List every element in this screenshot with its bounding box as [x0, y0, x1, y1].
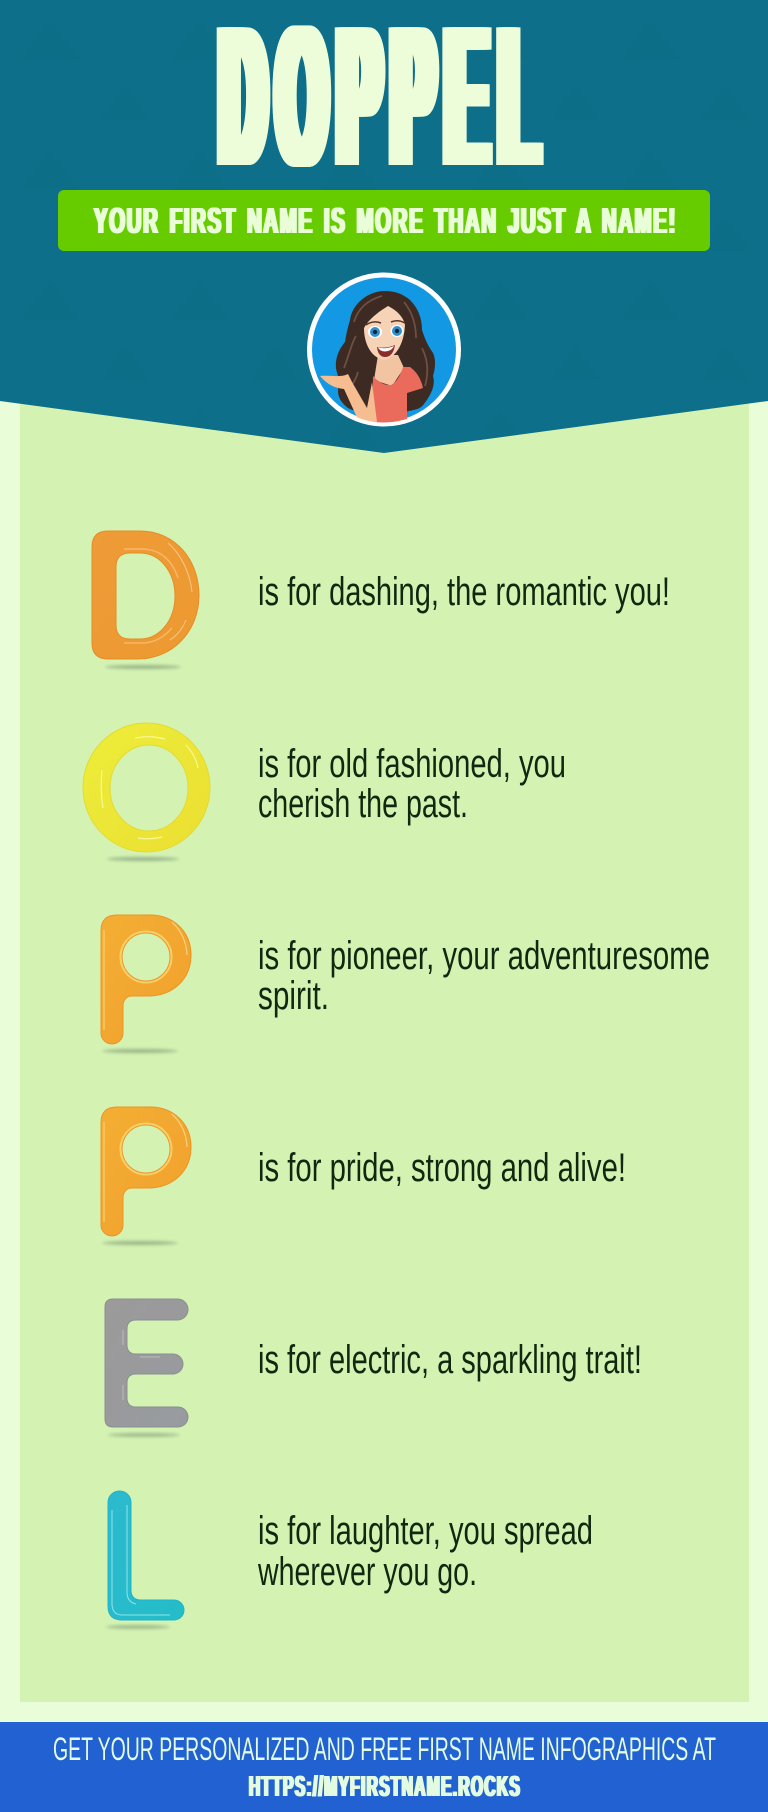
icon: letter L shadow	[106, 1625, 170, 1629]
row: letter P	[101, 915, 710, 1053]
icon: second letter P shadow	[102, 1241, 178, 1245]
icon: letter P	[101, 915, 191, 1044]
text: cherish the past: cherish the past.	[258, 782, 468, 826]
text: pride: is for pride, strong and alive!	[258, 1146, 626, 1190]
row: letter L	[106, 1491, 593, 1629]
icon: letter P shadow	[102, 1049, 178, 1053]
content panel	[20, 380, 749, 1702]
row: letter E	[105, 1299, 642, 1437]
icon: letter O	[83, 723, 210, 852]
icon: letter O shadow	[107, 857, 179, 861]
icon: letter D shadow	[105, 665, 181, 669]
icon: second letter P	[101, 1107, 191, 1236]
icon: letter E shadow	[108, 1433, 180, 1437]
text: laughter: is for laughter, you spread	[258, 1509, 593, 1553]
row: letter D	[92, 531, 670, 669]
text: old fashioned: is for old fashioned, you	[258, 742, 566, 786]
row: letter O	[83, 723, 566, 861]
subtitle bar	[58, 190, 710, 251]
icon: letter D	[92, 531, 199, 659]
text: wherever you go: wherever you go.	[257, 1550, 477, 1594]
header banner	[0, 0, 768, 453]
avatar: woman in circle	[310, 275, 458, 424]
icon: letter E	[105, 1299, 188, 1427]
text: spirit: spirit.	[258, 974, 329, 1018]
footer url: HTTPS://MYFIRSTNAME.ROCKS	[249, 1770, 521, 1802]
row: letter P second	[101, 1107, 626, 1245]
footer	[0, 1722, 768, 1812]
icon: letter L	[108, 1491, 184, 1620]
subtitle text: YOUR FIRST NAME IS MORE THAN JUST A NAME!	[94, 202, 677, 242]
